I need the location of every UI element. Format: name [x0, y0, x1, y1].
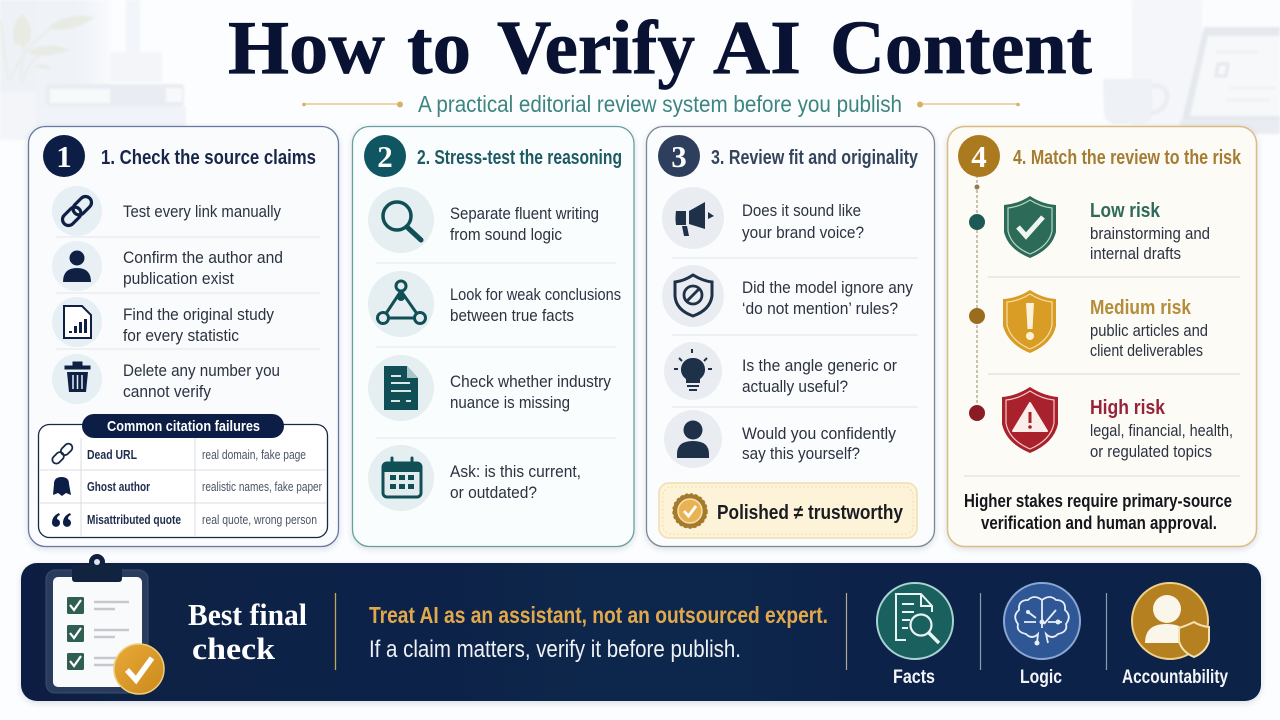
icon: person: [664, 410, 722, 468]
table: common citation failures: [38, 414, 328, 538]
item: current or outdated: or outdated?: [450, 483, 537, 502]
badge 2: [364, 135, 406, 177]
heading 3: 3. Review fit and originality: [711, 147, 919, 169]
item: industry nuance: [450, 372, 611, 412]
item: industry nuance: Check whether industry: [450, 372, 611, 391]
item: say this yourself: Would you confidently: [742, 424, 896, 443]
item: brand voice: Does it sound like: [742, 201, 861, 220]
icon: link: [52, 186, 102, 236]
label: logic: Logic: [1020, 667, 1062, 688]
medium risk text: [1090, 297, 1208, 360]
medium risk text: Medium risk: [1090, 297, 1192, 319]
item: test links: Test every link manually: [123, 202, 281, 221]
low risk text: Low risk: [1090, 200, 1161, 222]
high risk text: or regulated topics: [1090, 442, 1212, 461]
row: dead URL: Dead URL: [87, 448, 137, 462]
title: Verify: [497, 6, 695, 90]
badge 3: [658, 135, 700, 177]
heading 1: 1. Check the source claims: [101, 147, 316, 169]
badge 1: 1: [56, 139, 72, 174]
item: fluent writing: from sound logic: [450, 225, 562, 244]
item: do not mention: [742, 278, 913, 318]
icon: gold seal: [673, 494, 707, 528]
background decoration: plant and books: [0, 0, 186, 140]
item: delete number: cannot verify: [123, 382, 211, 401]
takeaway note: verification and human approval.: [981, 513, 1217, 533]
icon: high risk shield: [1002, 387, 1058, 453]
icon: low risk shield: [1004, 196, 1056, 258]
icon: document chart: [52, 297, 102, 347]
banner heading: check: [192, 631, 276, 666]
icon: megaphone: [662, 187, 724, 249]
row: misattributed quote: [52, 513, 317, 527]
badge 4: [958, 135, 1000, 177]
row: ghost author: Ghost author: [87, 480, 150, 494]
badge 3: 3: [671, 139, 687, 174]
takeaway note: Higher stakes require primary-source: [964, 491, 1232, 511]
row: dead URL: real domain, fake page: [202, 448, 306, 462]
icon: medium risk shield: [1003, 290, 1056, 353]
item: weak conclusions: Look for weak conclusions: [450, 285, 621, 304]
item: original study: [123, 305, 274, 345]
item: original study: Find the original study: [123, 305, 274, 324]
icon: person: [52, 241, 102, 291]
low risk text: brainstorming and: [1090, 224, 1210, 243]
icon: calendar: [368, 445, 434, 511]
low risk text: [1090, 200, 1210, 263]
high risk text: High risk: [1090, 397, 1166, 419]
item: brand voice: your brand voice?: [742, 223, 864, 242]
row: misattributed quote: real quote, wrong person: [202, 513, 317, 527]
icon: trash: [52, 354, 102, 404]
banner heading: Best final: [188, 597, 307, 632]
high risk text: [1090, 397, 1233, 461]
table heading pill: [82, 414, 284, 438]
panel: review fit and originality: [646, 126, 934, 546]
title: [228, 6, 1092, 90]
badge 4: 4: [971, 139, 987, 174]
icon: magnifier: [368, 187, 434, 253]
title: Content: [830, 6, 1092, 90]
subtitle: A practical editorial review system before you publish: [418, 91, 902, 117]
item: industry nuance: nuance is missing: [450, 393, 570, 412]
icon: accountability: [1132, 583, 1209, 659]
item: delete number: Delete any number you: [123, 361, 280, 380]
item: do not mention: Did the model ignore any: [742, 278, 913, 297]
panel: match the review to the risk: [948, 126, 1256, 546]
item: delete number: [123, 361, 280, 401]
label: facts: Facts: [893, 667, 935, 688]
item: confirm author: publication exist: [123, 269, 234, 288]
item: current or outdated: [450, 462, 581, 502]
icon: facts: [877, 583, 953, 659]
badge 1: [43, 135, 85, 177]
takeaway note: [964, 491, 1232, 533]
item: angle generic: Is the angle generic or: [742, 356, 897, 375]
banner heading: [188, 597, 307, 666]
icon: light bulb: [664, 342, 722, 400]
banner: best final check: [21, 554, 1261, 701]
icon: document: [368, 355, 434, 421]
icon: logic: [1004, 583, 1080, 659]
icon: shield with no symbol: [662, 265, 724, 327]
panel: stress-test the reasoning: [352, 126, 634, 546]
low risk text: internal drafts: [1090, 244, 1181, 263]
item: angle generic: actually useful?: [742, 377, 848, 396]
timeline: [969, 175, 985, 421]
banner message: Treat AI as an assistant, not an outsourced expert.: [369, 602, 828, 628]
banner message: If a claim matters, verify it before publish.: [369, 636, 741, 663]
row: misattributed quote: Misattributed quote: [87, 513, 181, 527]
item: fluent writing: Separate fluent writing: [450, 204, 599, 223]
item: brand voice: [742, 201, 864, 242]
background decoration: mug and laptop: [1103, 0, 1280, 134]
item: fluent writing: [450, 204, 599, 244]
item: weak conclusions: between true facts: [450, 306, 574, 325]
table heading pill: Common citation failures: [107, 418, 260, 435]
title: How: [228, 6, 385, 90]
label: accountability: Accountability: [1122, 667, 1228, 688]
item: say this yourself: say this yourself?: [742, 444, 860, 463]
item: confirm author: Confirm the author and: [123, 248, 283, 267]
callout: polished is not trustworthy: Polished ≠ trustworthy: [717, 502, 904, 524]
row: dead URL: [51, 442, 306, 465]
banner message: [369, 602, 828, 663]
row: ghost author: realistic names, fake paper: [202, 480, 322, 494]
heading 2: 2. Stress-test the reasoning: [417, 147, 622, 169]
item: confirm author: [123, 248, 283, 288]
item: current or outdated: Ask: is this current,: [450, 462, 581, 481]
medium risk text: public articles and: [1090, 321, 1208, 340]
title: to: [407, 6, 471, 90]
item: angle generic: [742, 356, 897, 396]
row: ghost author: [53, 477, 322, 496]
title: AI: [713, 6, 801, 90]
medium risk text: client deliverables: [1090, 341, 1203, 360]
high risk text: legal, financial, health,: [1090, 421, 1233, 440]
callout: polished is not trustworthy: [659, 483, 917, 538]
item: say this yourself: [742, 424, 896, 463]
panel: check the source claims: [28, 126, 338, 546]
icon: logic triangle: [368, 271, 434, 337]
item: weak conclusions: [450, 285, 621, 325]
item: original study: for every statistic: [123, 326, 239, 345]
icon: clipboard: [46, 554, 164, 694]
item: do not mention: ‘do not mention’ rules?: [742, 299, 898, 318]
badge 2: 2: [377, 139, 393, 174]
